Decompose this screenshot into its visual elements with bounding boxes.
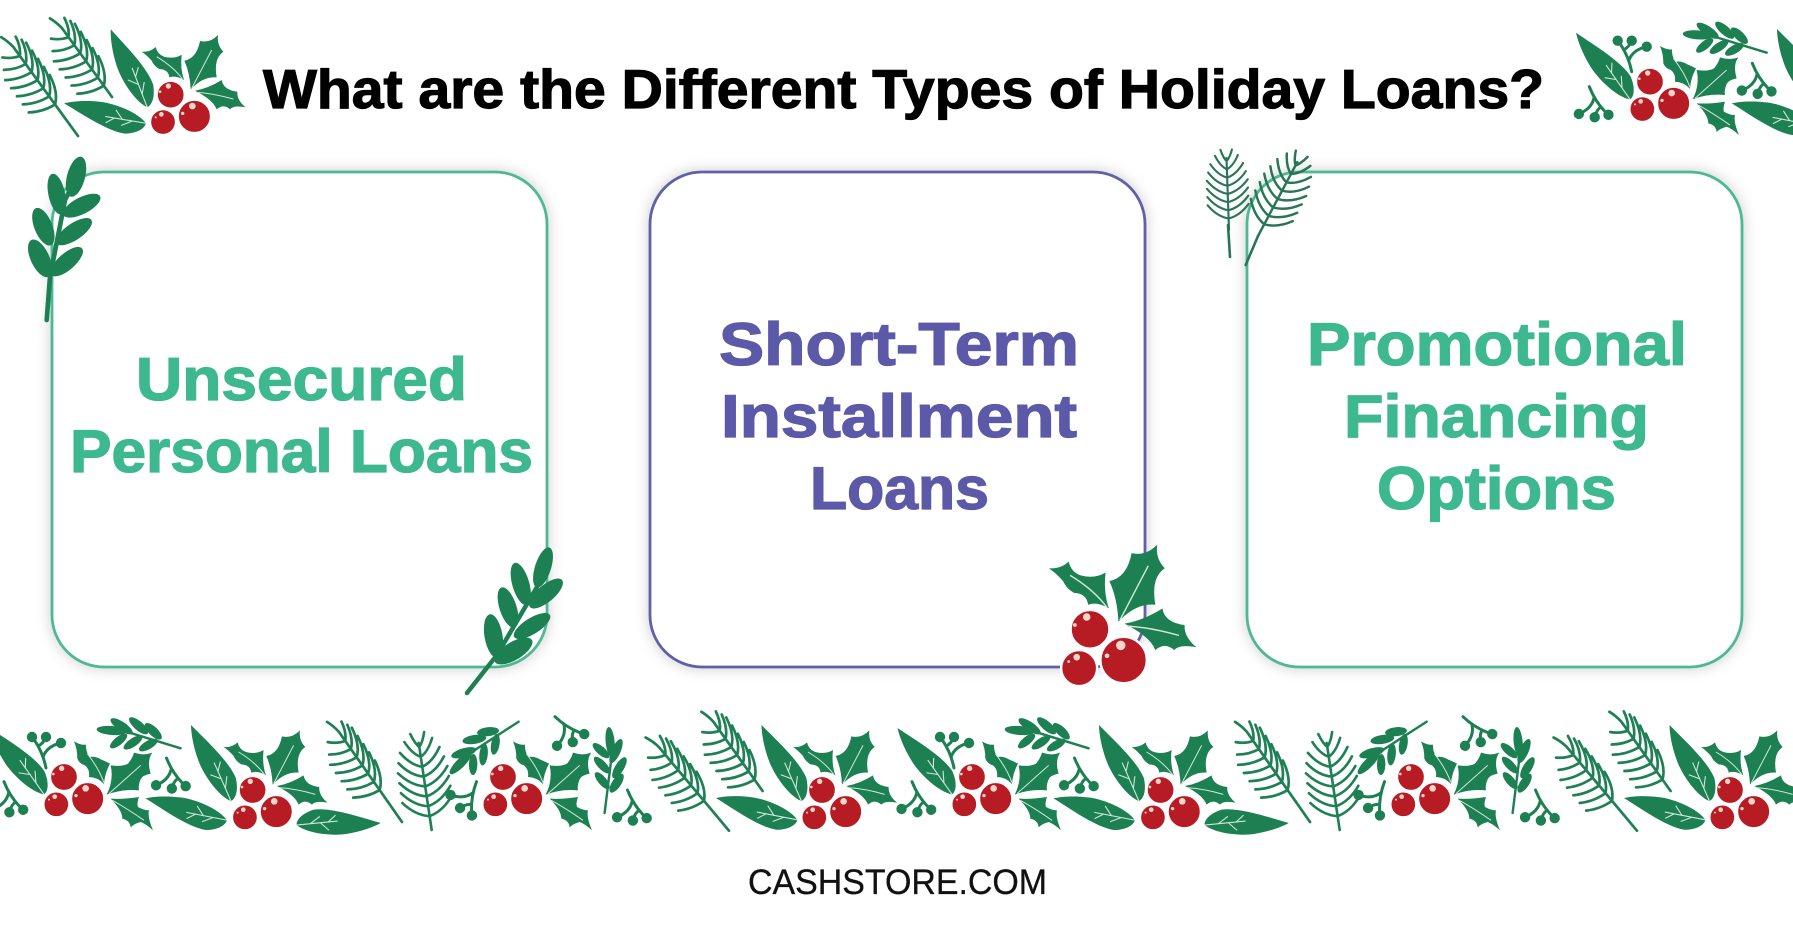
heading: short-term installment loans: Loans [810,455,989,522]
heading: unsecured personal loans: Personal Loans [70,418,533,485]
panel: short-term installment loans [650,172,1145,667]
heading: promotional financing options: Financing [1344,383,1649,450]
heading: unsecured personal loans: Unsecured [136,346,467,413]
heading: promotional financing options: Promotional [1307,311,1687,378]
holly garland strip [0,700,1793,847]
icon: olive sprig top-left of card 1 [0,139,136,336]
icon: olive sprig bottom-right of card 1 [467,545,568,693]
icon: header left garland [0,8,246,151]
panel: promotional financing options [1247,172,1742,667]
title: What are the Different Types of Holiday Loans? [263,58,1544,120]
icon: pine sprigs on card 3 [1206,143,1323,265]
heading: promotional financing options: Options [1377,455,1616,522]
icon: holly on card 2 [1049,545,1196,686]
heading: short-term installment loans: Installment [721,383,1077,450]
footer: website: CASHSTORE.COM [748,863,1047,902]
heading: short-term installment loans: Short-Term [719,311,1079,378]
icon: header right garland [1568,19,1793,140]
panel: unsecured personal loans [52,172,547,667]
